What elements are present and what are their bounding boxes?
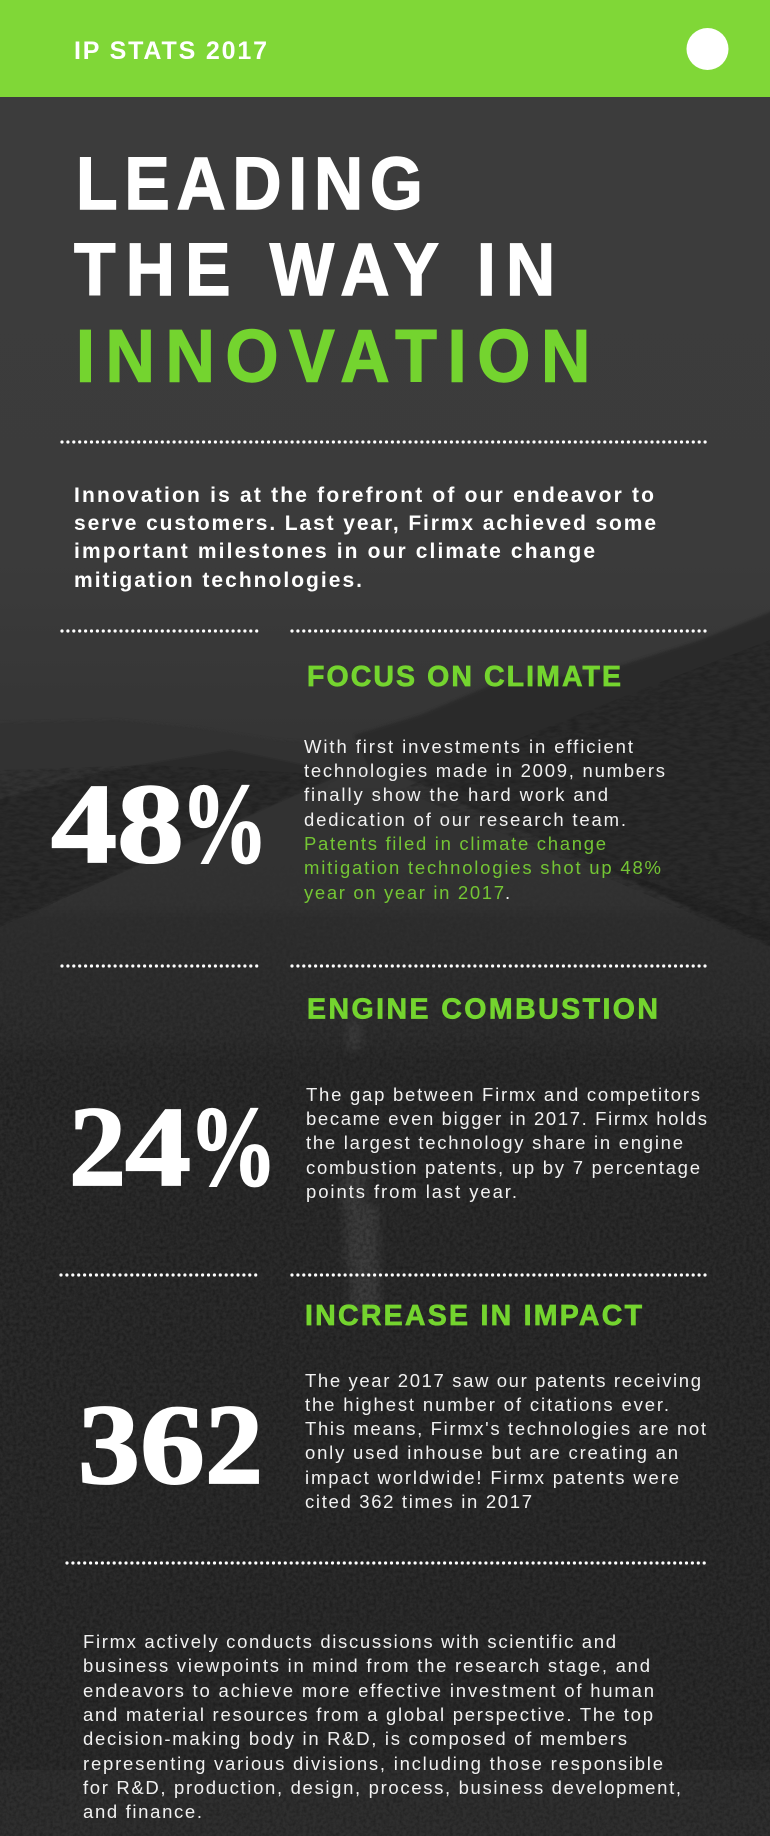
header label: IP STATS 2017: [74, 37, 267, 65]
closing text: [83, 1631, 681, 1822]
body text: increase in impact: The year 2017 saw our patents receiving: [305, 1370, 701, 1391]
big stat: 362: 2: [205, 1381, 263, 1508]
body text: focus on climate: .: [505, 882, 510, 903]
body text: focus on climate: year on year in 2017: [304, 882, 504, 903]
body text: engine combustion: became even bigger in 2017. Firmx holds: [306, 1108, 707, 1129]
closing text: endeavors to achieve more effective investment of human: [83, 1680, 654, 1701]
closing text: decision-making body in R&D, is composed of members: [83, 1728, 627, 1749]
panel: engine combustion: [69, 994, 707, 1210]
big stat: 24%: 4: [125, 1083, 191, 1210]
body text: focus on climate: [304, 736, 665, 903]
body text: engine combustion: combustion patents, up by 7 percentage: [306, 1157, 700, 1178]
panel: focus on climate: [51, 661, 665, 903]
heading: engine combustion: ENGINE COMBUSTION: [307, 994, 658, 1026]
big stat: 48%: 8: [117, 760, 184, 887]
panel: increase in impact: [78, 1300, 706, 1512]
body text: increase in impact: impact worldwide! Firmx patents were: [305, 1467, 679, 1488]
closing text: and material resources from a global perspective. The top: [83, 1704, 653, 1725]
big stat: 362: [78, 1381, 263, 1508]
body text: focus on climate: With first investments in efficient: [304, 736, 633, 757]
body text: focus on climate: technologies made in 2009, numbers: [304, 760, 665, 781]
big stat: 362: 3: [78, 1381, 140, 1508]
body text: increase in impact: cited 362 times in 2017: [305, 1491, 532, 1512]
heading: focus on climate: FOCUS ON CLIMATE: [307, 661, 621, 693]
body text: focus on climate: dedication of our research team.: [304, 809, 626, 830]
body text: engine combustion: The gap between Firmx and competitors: [306, 1084, 700, 1105]
intro text: important milestones in our climate change: [74, 540, 595, 563]
big stat: 362: 6: [140, 1381, 205, 1508]
body text: increase in impact: [305, 1370, 706, 1512]
body text: focus on climate: Patents filed in climate change: [304, 833, 606, 854]
heading: increase in impact: INCREASE IN IMPACT: [305, 1300, 643, 1332]
big stat: 48%: 4: [51, 760, 117, 887]
big stat: 24%: 2: [69, 1083, 126, 1210]
closing text: Firmx actively conducts discussions with scientific and: [83, 1631, 616, 1652]
closing text: representing various divisions, including those responsible: [83, 1753, 663, 1774]
title: LEADING: [76, 143, 423, 226]
intro text: mitigation technologies.: [74, 569, 362, 592]
closing text: and finance.: [83, 1801, 202, 1822]
body text: engine combustion: points from last year.: [306, 1181, 517, 1202]
closing text: business viewpoints in mind from the research stage, and: [83, 1655, 650, 1676]
big stat: 24%: [69, 1083, 277, 1210]
big stat: 24%: %: [189, 1083, 277, 1210]
intro text: [74, 484, 656, 592]
body text: focus on climate: finally show the hard work and: [304, 784, 608, 805]
body text: engine combustion: [306, 1084, 707, 1202]
header bar: [0, 0, 770, 97]
body text: increase in impact: the highest number of citations ever.: [305, 1394, 669, 1415]
body text: engine combustion: the largest technology share in engine: [306, 1132, 683, 1153]
intro text: Innovation is at the forefront of our endeavor to: [74, 484, 654, 507]
title: INNOVATION: [76, 316, 590, 398]
closing text: for R&D, production, design, process, business development,: [83, 1777, 681, 1798]
big stat: 48%: %: [181, 760, 268, 887]
body text: increase in impact: only used inhouse but are creating an: [305, 1442, 678, 1463]
title: [74, 143, 590, 398]
body text: focus on climate: mitigation technologies shot up 48%: [304, 857, 661, 878]
intro text: serve customers. Last year, Firmx achieved some: [74, 512, 656, 535]
icon: white circle: [686, 28, 728, 70]
body text: increase in impact: This means, Firmx's technologies are not: [305, 1418, 706, 1439]
big stat: 48%: [51, 760, 268, 887]
title: THE WAY IN: [74, 229, 555, 312]
